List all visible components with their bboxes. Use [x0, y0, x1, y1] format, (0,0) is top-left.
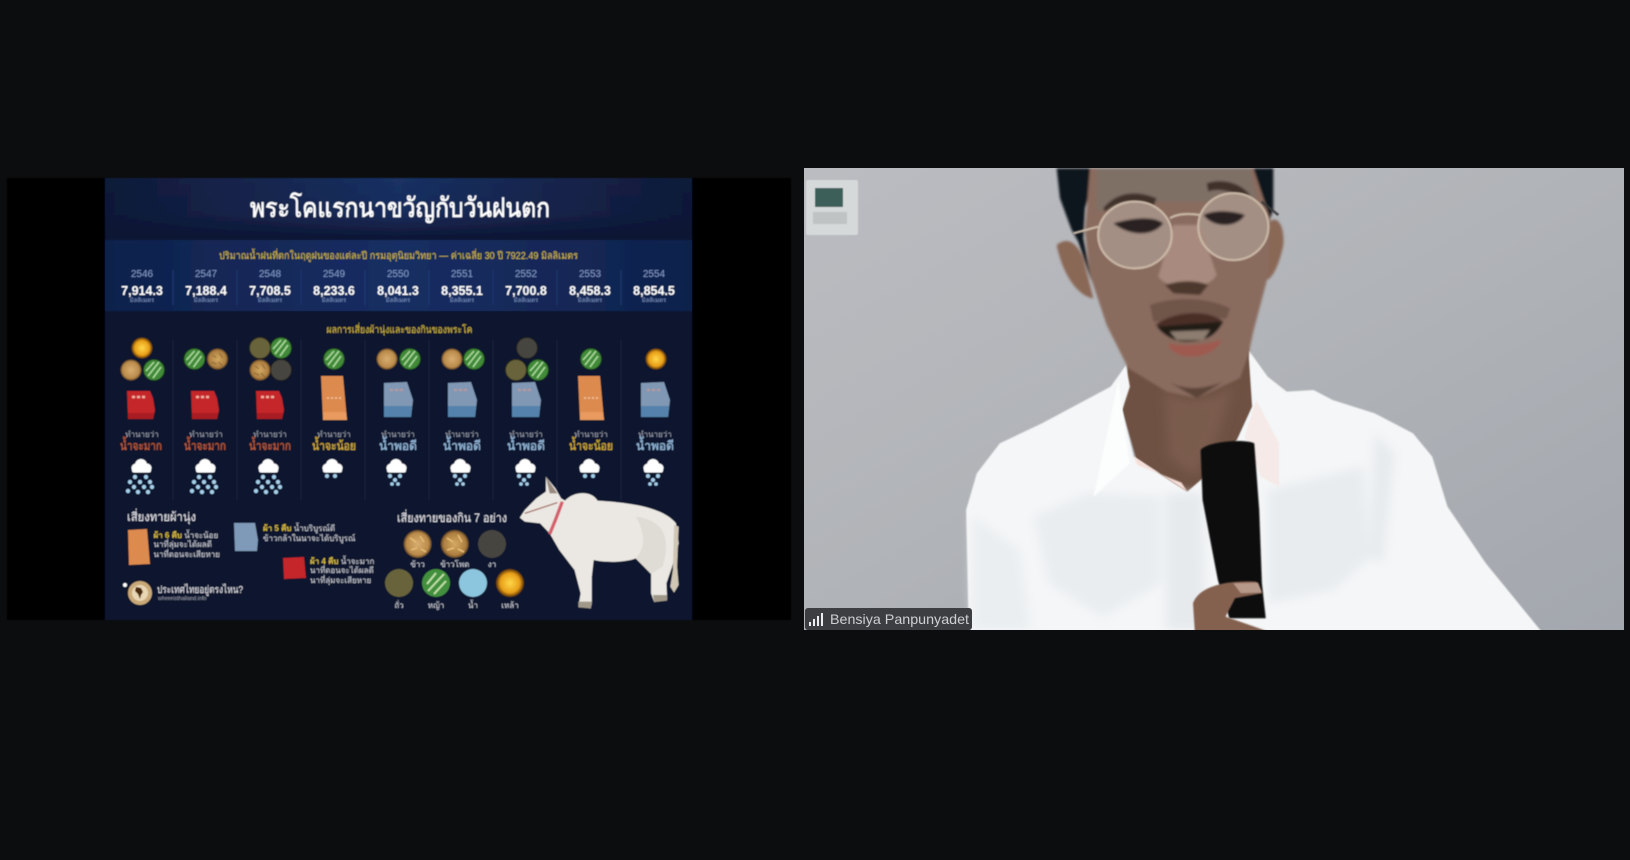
food icons per year	[120, 338, 666, 380]
rain clouds	[126, 459, 663, 494]
cow illustration	[520, 477, 679, 608]
cloth legend	[127, 508, 374, 585]
red cloth	[283, 557, 306, 579]
rice: ข้าว	[410, 560, 425, 569]
wall	[804, 168, 1624, 630]
food legend heading: เสี่ยงทายของกิน 7 อย่าง	[397, 509, 507, 525]
results heading: ผลการเสี่ยงผ้านุ่งและของกินของพระโค	[326, 322, 472, 336]
forecast small label: ทำนายว่า	[574, 430, 608, 439]
orange cloth	[128, 529, 150, 565]
units: มิลลิเมตร	[642, 297, 667, 304]
neck highlight	[1168, 395, 1226, 470]
eyebrows	[1103, 181, 1250, 212]
forecast small label: ทำนายว่า	[638, 430, 672, 439]
forecast small label: ทำนายว่า	[317, 430, 351, 439]
forecast small label: ทำนายว่า	[125, 430, 159, 439]
rainfall subtitle: ปริมาณน้ำฝนที่ตกในฤดูฝนของแต่ละปี กรมอุตุนิยมวิทยา — ค่าเฉลี่ย 30 ปี 7922.49 มิลลิเมตร	[219, 248, 579, 262]
teeth	[1170, 330, 1210, 340]
4 span text: ผ้า 4 คืบ น้ำจะมาก	[310, 555, 374, 566]
title: พระโคแรกนาขวัญกับวันฝนตก	[250, 193, 550, 223]
chin shadow	[1174, 382, 1220, 399]
units: มิลลิเมตร	[130, 297, 155, 304]
nostrils	[1165, 281, 1208, 295]
rainfall values: 8,854.5	[633, 284, 675, 298]
rainfall values: 7,188.4	[185, 284, 227, 298]
forecast small label: ทำนายว่า	[509, 430, 543, 439]
units: มิลลิเมตร	[514, 297, 539, 304]
years: 2547	[195, 269, 218, 280]
6 span text	[154, 529, 220, 559]
rainfall values: 7,914.3	[121, 284, 163, 298]
rainfall values: 8,355.1	[441, 284, 483, 298]
rainfall values: 7,708.5	[249, 284, 291, 298]
years: 2551	[451, 269, 474, 280]
forecast labels: น้ำพอดี	[636, 436, 674, 453]
6 span text: ผ้า 6 คืบ น้ำจะน้อย	[154, 529, 218, 540]
units: มิลลิเมตร	[450, 297, 475, 304]
forecast small label: ทำนายว่า	[253, 430, 287, 439]
microphone	[1201, 441, 1266, 618]
forecast labels: น้ำพอดี	[379, 436, 417, 453]
shared slide panel	[7, 178, 791, 620]
rainfall values: 8,458.3	[569, 284, 611, 298]
hand	[1192, 580, 1267, 630]
forecast labels: น้ำพอดี	[507, 436, 545, 453]
corn: ข้าวโพด	[440, 559, 469, 569]
logo	[123, 581, 243, 605]
5 span text	[263, 522, 356, 544]
units: มิลลิเมตร	[194, 297, 219, 304]
rainfall band	[105, 240, 692, 311]
eyes	[1113, 211, 1245, 233]
collar details	[1094, 402, 1279, 495]
blue cloth	[234, 523, 258, 551]
infographic background	[105, 178, 692, 620]
forecast small label: ทำนายว่า	[381, 430, 415, 439]
food legend	[385, 509, 524, 610]
header band	[105, 178, 692, 240]
units	[130, 297, 667, 304]
rainfall values: 7,700.8	[505, 284, 547, 298]
cloth icons per year	[127, 376, 670, 420]
beans: ถั่ว	[394, 599, 404, 610]
upper lip	[1155, 313, 1223, 328]
glasses	[1073, 193, 1278, 268]
units: มิลลิเมตร	[258, 297, 283, 304]
slide letterbox	[7, 178, 791, 620]
mouth	[1157, 322, 1223, 342]
forecast labels: น้ำจะน้อย	[569, 436, 613, 453]
units: มิลลิเมตร	[578, 297, 603, 304]
6 span text: นาที่ลุ่มจะได้ผลดี	[154, 538, 212, 549]
forecast labels: น้ำจะมาก	[120, 436, 162, 453]
6 span text: นาที่ดอนจะเสียหาย	[154, 548, 220, 559]
cloth legend heading: เสี่ยงทายผ้านุ่ง	[127, 508, 196, 525]
forecast labels: น้ำพอดี	[443, 436, 481, 453]
forecast labels: น้ำจะมาก	[249, 436, 291, 453]
shirt	[966, 350, 1557, 650]
water: น้ำ	[468, 599, 478, 610]
years: 2553	[579, 269, 602, 280]
wall thermostat	[806, 180, 858, 235]
video panel: speaker	[804, 168, 1624, 650]
forecast small label: ทำนายว่า	[445, 430, 479, 439]
years: 2546	[131, 269, 154, 280]
rainfall values: 8,041.3	[377, 284, 419, 298]
5 span text: ข้าวกล้าในนาจะได้บริบูรณ์	[263, 533, 356, 544]
head	[1057, 168, 1284, 398]
units: มิลลิเมตร	[386, 297, 411, 304]
liquor: เหล้า	[501, 601, 519, 610]
forecast small label: ทำนายว่า	[189, 430, 223, 439]
forecast small label	[125, 430, 672, 439]
logo url: whereisthailand.info	[157, 596, 207, 602]
name plate	[805, 608, 972, 630]
years: 2550	[387, 269, 410, 280]
shirt shading	[973, 433, 1394, 629]
forecast labels	[120, 436, 674, 453]
speaker name: Bensiya Panpunyadet	[830, 611, 969, 627]
nose	[1158, 225, 1217, 288]
rainfall values: 8,233.6	[313, 284, 355, 298]
forehead	[1097, 168, 1257, 212]
logo text: ประเทศไทยอยู่ตรงไหน?	[157, 583, 243, 596]
forecast labels: น้ำจะน้อย	[312, 436, 356, 453]
years: 2554	[643, 269, 666, 280]
forecast labels: น้ำจะมาก	[184, 436, 226, 453]
sesame: งา	[488, 560, 496, 569]
years: 2548	[259, 269, 282, 280]
hair	[1057, 168, 1273, 282]
rainfall values	[121, 284, 675, 298]
body	[966, 347, 1557, 650]
ears	[1057, 220, 1284, 298]
4 span text: นาที่ดอนจะได้ผลดี	[310, 564, 374, 575]
mustache shade	[1150, 299, 1230, 322]
4 span text	[310, 555, 374, 585]
neck	[1122, 347, 1252, 493]
years	[131, 269, 666, 280]
units: มิลลิเมตร	[322, 297, 347, 304]
lower lip	[1168, 339, 1222, 357]
thumb tip	[1233, 583, 1262, 593]
years: 2552	[515, 269, 538, 280]
years: 2549	[323, 269, 346, 280]
signal bars	[809, 613, 823, 626]
4 span text: นาที่ลุ่มจะเสียหาย	[310, 574, 371, 585]
5 span text: ผ้า 5 คืบ น้ำบริบูรณ์ดี	[263, 522, 335, 534]
grass: หญ้า	[428, 601, 444, 610]
lens lightening	[1098, 193, 1268, 268]
face	[1085, 168, 1270, 398]
